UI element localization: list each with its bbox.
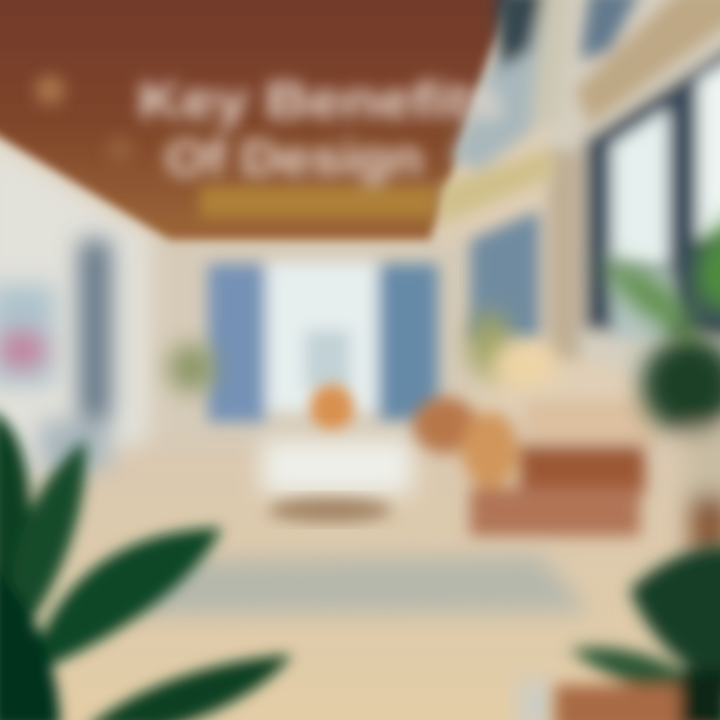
title: [138, 72, 503, 186]
title: Key Benefits: [138, 72, 503, 130]
bottom left plant: [0, 410, 292, 720]
left wall: [0, 130, 150, 490]
rug: [130, 555, 590, 615]
far right sofa side plant: [468, 311, 512, 379]
ceiling: [0, 0, 515, 240]
orange accent chair: [310, 384, 354, 432]
ceiling lights: [35, 75, 133, 163]
small indoor plant: [168, 344, 216, 392]
back wall: [140, 235, 470, 445]
white coffee table: [262, 440, 412, 494]
floor glass reflection: [520, 680, 550, 720]
ceiling golden beam: [200, 186, 435, 218]
title: Of Design: [165, 130, 423, 186]
sofa cushion highlight: [491, 343, 559, 387]
bottom right plant: [555, 546, 720, 720]
centre window: [208, 262, 438, 422]
upper right glass and beams: [440, 0, 720, 225]
sofa: [413, 397, 655, 536]
left wall artwork: [0, 240, 110, 470]
right plant: [600, 210, 720, 555]
coffee table shadow: [268, 498, 392, 522]
right wall and windows: [470, 0, 720, 420]
floor: [0, 420, 720, 720]
